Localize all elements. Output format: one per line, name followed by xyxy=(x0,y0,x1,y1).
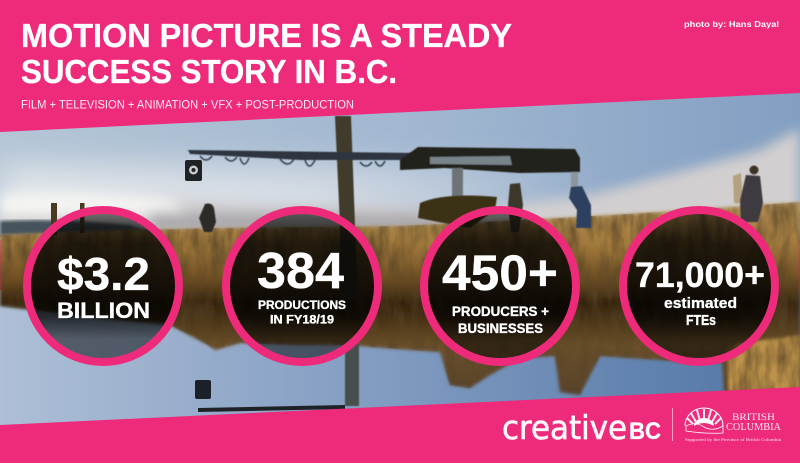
logo: Creative BC: creative xyxy=(502,408,627,447)
crane arm xyxy=(188,150,415,166)
photo: film crane crew in a field xyxy=(0,90,800,430)
fence posts xyxy=(51,203,84,235)
stat circle: 71,000+ estimated FTEs xyxy=(623,210,775,362)
stat circle: 71,000+ estimated FTEs: 71,000+ xyxy=(635,256,765,295)
stat circle: 384 productions: PRODUCTIONS xyxy=(258,298,346,312)
stat circle: 384 productions: 384 xyxy=(257,242,345,299)
horizon haze xyxy=(0,165,600,225)
water reflection of the pole xyxy=(345,340,359,406)
crew member beside truck xyxy=(508,183,523,232)
grass field xyxy=(0,202,800,400)
stat circle: 384 productions xyxy=(226,210,378,362)
stat circle: 71,000+ estimated FTEs: estimated xyxy=(664,295,737,312)
top pink banner xyxy=(0,0,800,132)
logo: Creative BC: BC xyxy=(629,418,661,445)
sky xyxy=(0,90,800,240)
stat circle: 450+ producers and businesses: BUSINESSES xyxy=(458,320,543,336)
title xyxy=(21,17,512,90)
wooden pole xyxy=(335,116,358,300)
icon: rising sun xyxy=(685,408,723,433)
stat circle: 450+ producers and businesses xyxy=(424,210,576,362)
two crew members on the right xyxy=(733,166,763,222)
logo: British Columbia: Supported by the Province of British Columbia xyxy=(685,437,781,442)
crane truck xyxy=(400,147,580,228)
logo: British Columbia: COLUMBIA xyxy=(726,422,782,433)
logo: British Columbia xyxy=(685,408,782,442)
bottom pink banner xyxy=(0,387,800,463)
stat circle: $3.2 billion xyxy=(27,210,179,362)
logo divider xyxy=(672,408,673,441)
stat circle: 71,000+ estimated FTEs: FTEs xyxy=(686,312,716,329)
camera reflection xyxy=(195,380,345,412)
title: SUCCESS STORY IN B.C. xyxy=(21,53,397,90)
stat circle: 384 productions: IN FY18/19 xyxy=(270,312,334,326)
fog bank xyxy=(0,128,800,240)
title: MOTION PICTURE IS A STEADY xyxy=(21,17,512,54)
stat circle: 450+ producers and businesses: 450+ xyxy=(442,245,558,301)
photo credit: photo by: Hans Dayal xyxy=(684,19,779,29)
distant tree line xyxy=(0,220,150,236)
grass blade texture xyxy=(0,200,800,400)
golden grass on the far right bank xyxy=(728,335,800,398)
crew member bending xyxy=(569,186,591,228)
stat circle: $3.2 billion: $3.2 xyxy=(57,248,150,300)
crane camera head xyxy=(185,160,202,181)
stat circle: 450+ producers and businesses: PRODUCERS + xyxy=(452,303,549,319)
water xyxy=(0,290,800,430)
stat circle: $3.2 billion: BILLION xyxy=(57,298,150,323)
crew member walking xyxy=(199,204,216,232)
logo: British Columbia: BRITISH xyxy=(732,413,775,423)
subtitle: FILM + TELEVISION + ANIMATION + VFX + POST-PRODUCTION xyxy=(21,98,354,112)
